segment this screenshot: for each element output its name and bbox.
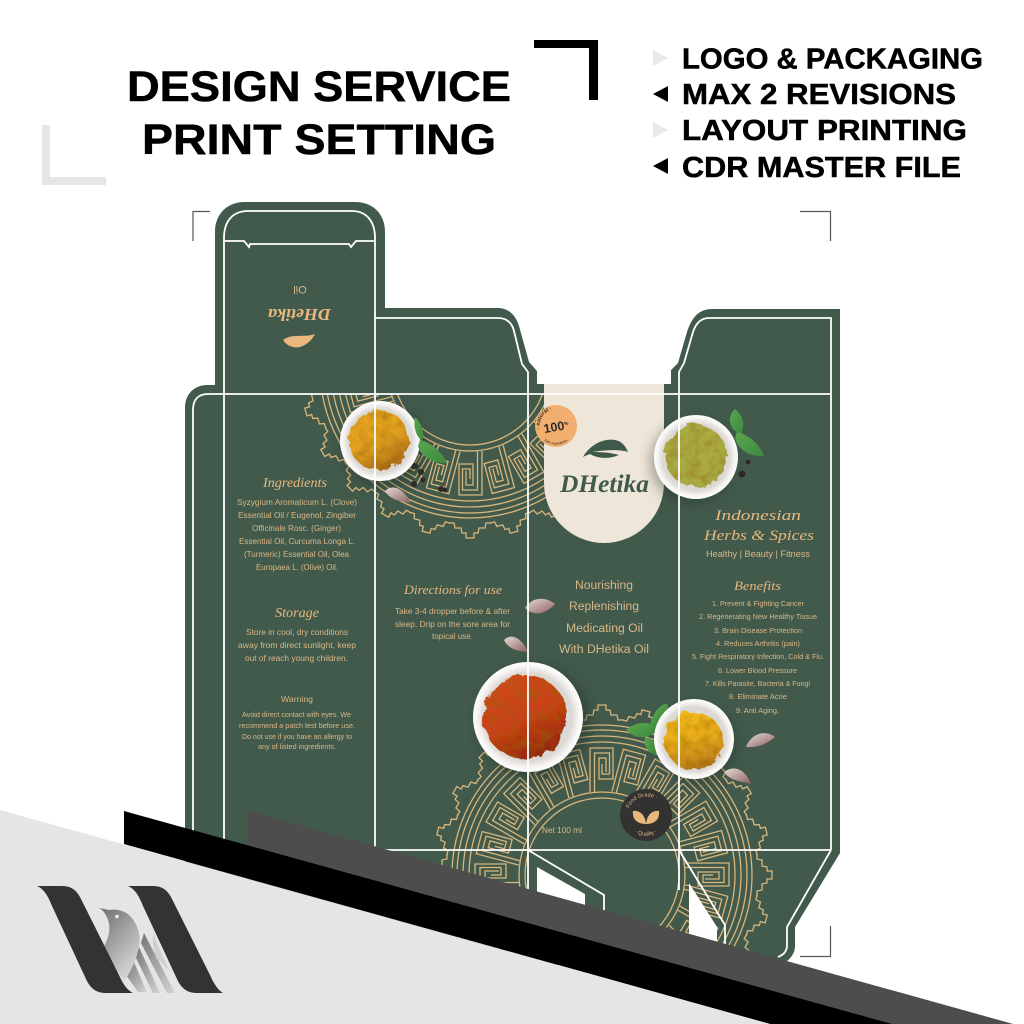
ingredients text: (Turmeric) Essential Oil, Olea [244, 549, 349, 559]
icon: tan leaf [283, 334, 315, 347]
storage text: out of reach young children. [245, 653, 348, 663]
garlic clove bottom lower [724, 768, 751, 784]
benefits list: 2. Regenerating New Healthy Tissue [699, 612, 817, 621]
heading: ingredients: Ingredients [262, 476, 328, 491]
warning text: Do not use if you have an allergy to [242, 732, 352, 741]
logo shade [153, 934, 169, 970]
crop marks [193, 212, 830, 956]
subheading: Healthy | Beauty | Fitness [706, 549, 810, 559]
ingredients text: Essential Oil, Curcuma Longa L. [239, 536, 355, 546]
white fold lines [185, 211, 831, 960]
garlic clove middle upper [525, 599, 555, 613]
list item: master file: CDR MASTER FILE [682, 152, 961, 184]
packaging dieline box [185, 202, 840, 965]
badge: food grade quality [620, 789, 672, 841]
ingredients text: Officinale Rosc. (Ginger) [252, 523, 341, 533]
directions text: topical use. [432, 631, 473, 641]
benefits list: 8. Eliminate Acne [729, 692, 787, 701]
bowl: green powder [650, 415, 738, 504]
peppercorns top [411, 463, 448, 492]
ingredients text: Europaea L. (Olive) Oil. [256, 562, 338, 572]
warning text: Avoid direct contact with eyes. We [242, 710, 351, 719]
directions text: sleep. Drip on the sore area for [395, 619, 510, 629]
logo feathers [126, 933, 175, 993]
die cut notch left [537, 867, 585, 925]
title: PRINT SETTING [142, 116, 496, 164]
warning text: any of listed ingredients. [258, 742, 336, 751]
ingredients text: Essential Oil / Eugenol, Zingiber [238, 510, 356, 520]
diagonal band: dark grey [248, 811, 1024, 1024]
storage text [238, 627, 356, 663]
list item: logo and packaging: LOGO & PACKAGING [682, 44, 983, 76]
flap brand: upside down [267, 283, 332, 347]
heading: warning: Warning [281, 694, 313, 704]
peppercorns right [738, 460, 750, 478]
diagonal band: black [124, 811, 892, 1024]
tagline: Medicating Oil [566, 623, 643, 635]
heading: benefits: Benefits [734, 578, 781, 593]
badge: food grade quality: · Food Grade · [626, 792, 657, 811]
bowl: red powder [473, 662, 590, 778]
ornament: lower greek key ring [436, 704, 773, 956]
title: DESIGN SERVICE [127, 63, 511, 111]
logo bird body [99, 908, 140, 981]
benefits list: 1. Prevent & Fighting Cancer [712, 599, 804, 608]
net volume: Net 100 ml [542, 825, 582, 835]
badge: natural 100 percent: 100 [542, 419, 565, 436]
ingredients text: Syzygium Aromaticum L. (Clove) [237, 497, 357, 507]
badge: food grade quality: · Quality · [636, 830, 656, 836]
tagline: Nourishing [575, 580, 633, 592]
heading: indonesian herbs and spices: Indonesian [714, 508, 801, 524]
storage text: Store in cool, dry conditions [246, 627, 348, 637]
benefits list: 5. Fight Respiratory Infection, Cold & Flu. [692, 652, 824, 661]
logo: bird monogram [37, 886, 223, 993]
warning text [239, 710, 355, 751]
garlic clove middle lower [504, 637, 528, 652]
icon: dark green leaf logo [583, 440, 628, 458]
tagline: With DHetika Oil [559, 644, 649, 656]
flap text: DHetika: DHetika [267, 305, 332, 324]
tagline: Replenishing [569, 601, 639, 613]
leaf: mint right [730, 409, 764, 456]
brand name: DHetika [559, 471, 649, 498]
logo left ribbon [37, 886, 133, 993]
bowl: turmeric top [340, 401, 424, 487]
black corner bracket [534, 40, 598, 100]
tagline [559, 580, 649, 656]
leaf: basil top [414, 417, 447, 463]
logo bird eye [115, 915, 119, 918]
benefits list: 7. Kills Parasite, Bacteria & Fungi [705, 679, 810, 688]
badge: natural 100 percent [535, 405, 577, 447]
bowl: turmeric bottom [654, 699, 737, 784]
panel: front label [535, 405, 672, 841]
panel: ingredients, storage and warning text [237, 476, 357, 751]
panel: directions for use [395, 582, 510, 641]
light corner bracket [42, 125, 106, 185]
benefits list: 4. Reduces Arthritis (pain) [716, 639, 800, 648]
benefits list: 9. Anti Aging. [736, 706, 779, 715]
logo right ribbon [128, 886, 223, 993]
leaf: basil bottom [626, 704, 668, 756]
warning text: recommend a patch test before use. [239, 721, 355, 730]
directions text [395, 606, 510, 641]
front label: cream panel [544, 384, 664, 543]
garlic clove bottom right [746, 733, 775, 747]
heading: directions: Directions for use [403, 582, 502, 597]
title [127, 63, 511, 164]
storage text: away from direct sunlight, keep [238, 640, 356, 650]
panel: benefits [692, 508, 824, 715]
diagonal band: light grey [0, 810, 770, 1024]
list item: revisions: MAX 2 REVISIONS [682, 79, 956, 111]
die cut notch right [689, 883, 717, 965]
flap text: Oil: Oil [293, 283, 307, 295]
benefits list [692, 599, 824, 715]
benefits list: 6. Lower Blood Pressure [718, 666, 797, 675]
list item: layout printing: LAYOUT PRINTING [682, 115, 967, 147]
badge: natural 100 percent: % [564, 421, 570, 428]
badge: natural 100 percent: · natural · [536, 408, 551, 430]
garlic clove top [385, 487, 411, 503]
directions text: Take 3-4 dropper before & after [395, 606, 510, 616]
service list [653, 44, 983, 184]
heading: indonesian herbs and spices [703, 508, 814, 544]
ingredients text [237, 497, 357, 572]
benefits list: 3. Brain Disease Protection [714, 626, 802, 635]
heading: indonesian herbs and spices: Herbs & Spices [703, 528, 814, 544]
box body [185, 202, 840, 965]
ornament: upper greek key ring [304, 394, 554, 539]
badge: natural 100 percent: Safe Ingredients [544, 438, 568, 446]
heading: storage: Storage [275, 606, 319, 621]
